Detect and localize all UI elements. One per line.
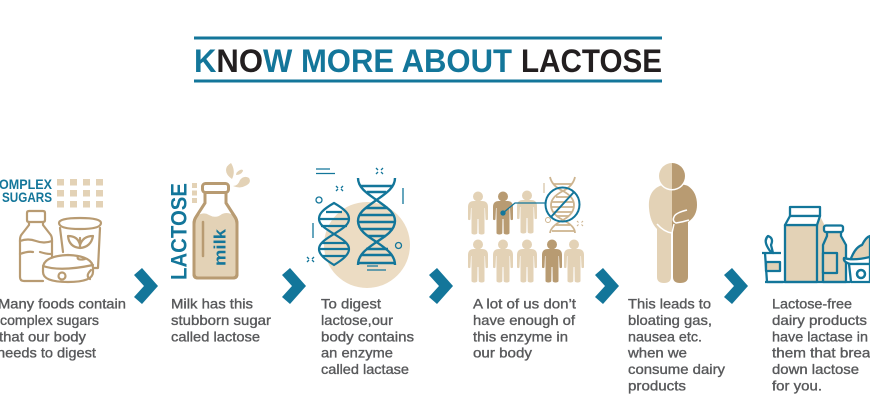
right half body <box>672 184 697 283</box>
text: step 5: when we <box>627 344 687 360</box>
text: step 4 <box>473 296 576 360</box>
text: step 6: Lactose-free <box>772 296 852 312</box>
tan DNA strand <box>550 177 575 233</box>
text: step 5: products <box>628 378 686 394</box>
text: step 4: have enough of <box>473 312 575 328</box>
vertical lactose label: LACTOSE <box>166 183 192 280</box>
yogurt cup with spoon <box>762 236 850 282</box>
text: step 6: have lactase in <box>772 328 868 344</box>
label: complex sugars: SUGARS <box>2 189 52 205</box>
small helix <box>319 203 349 265</box>
title: LACTOSE <box>521 43 662 79</box>
text: step 5 <box>627 296 725 394</box>
left half body <box>649 184 672 283</box>
text: step 5: bloating gas, <box>628 312 712 328</box>
text: step 2 <box>171 296 271 344</box>
text: step 3: To digest <box>321 296 381 312</box>
crowd of people <box>468 190 584 282</box>
icon: DNA enzyme <box>307 168 410 288</box>
text: step 5: consume dairy <box>628 361 725 377</box>
text: step 5: This leads to <box>628 296 711 312</box>
icon: lactose milk bottle <box>166 163 250 280</box>
text: step 2: called lactose <box>171 328 260 344</box>
text: step 4: our body <box>473 344 532 360</box>
text: step 1: complex sugars <box>0 312 99 328</box>
head <box>658 162 686 190</box>
chevron arrow 3 <box>429 268 453 304</box>
icon: lactose-free dairy products <box>762 207 870 282</box>
sugar cube grid <box>57 179 103 208</box>
text: step 6: dairy products <box>772 312 867 328</box>
milk bottle <box>823 226 846 282</box>
icon: complex sugars foods <box>0 176 103 282</box>
icon: people lacking enzyme <box>468 177 584 282</box>
chevron arrow 2 <box>282 268 306 304</box>
text: step 1 <box>0 296 126 360</box>
title <box>194 36 662 82</box>
large helix <box>358 178 395 265</box>
text: step 3: lactose,our <box>321 312 393 328</box>
label: complex sugars <box>0 176 53 205</box>
decorative marks <box>544 183 583 226</box>
text: step 2: Milk has this <box>171 296 253 312</box>
decorative marks <box>307 168 403 270</box>
whipped cream tub <box>844 236 870 282</box>
chevron arrow 4 <box>595 268 619 304</box>
milk splash <box>226 163 250 188</box>
background circle <box>324 202 410 288</box>
folded arm <box>657 210 689 233</box>
text: step 3: body contains <box>321 328 414 344</box>
title: KNOW MORE ABOUT <box>194 43 512 79</box>
text: step 4: this enzyme in <box>473 328 568 344</box>
text: step 6: them that break <box>772 344 870 360</box>
text: step 3 <box>321 296 414 377</box>
dots <box>192 183 197 203</box>
text: step 4: A lot of us don’t <box>473 296 576 312</box>
crossed-out magnifier <box>546 188 580 222</box>
pointer line <box>501 203 545 215</box>
text: step 1: Many foods contain <box>0 296 126 312</box>
text: step 3: called lactase <box>321 361 409 377</box>
food containers <box>20 211 101 282</box>
text: step 6: down lactose <box>772 361 859 377</box>
carton <box>785 207 826 282</box>
text: step 6: for you. <box>772 378 822 394</box>
chevron arrow 1 <box>134 268 158 304</box>
bottle: milk <box>210 228 230 266</box>
text: step 3: an enzyme <box>321 344 393 360</box>
text: step 1: that our body <box>0 328 86 344</box>
text: step 5: nausea etc. <box>628 328 702 344</box>
text: step 2: stubborn sugar <box>171 312 271 328</box>
icon: bloated person <box>649 162 697 283</box>
text: step 6 <box>772 296 870 394</box>
chevron arrow 5 <box>724 268 748 304</box>
